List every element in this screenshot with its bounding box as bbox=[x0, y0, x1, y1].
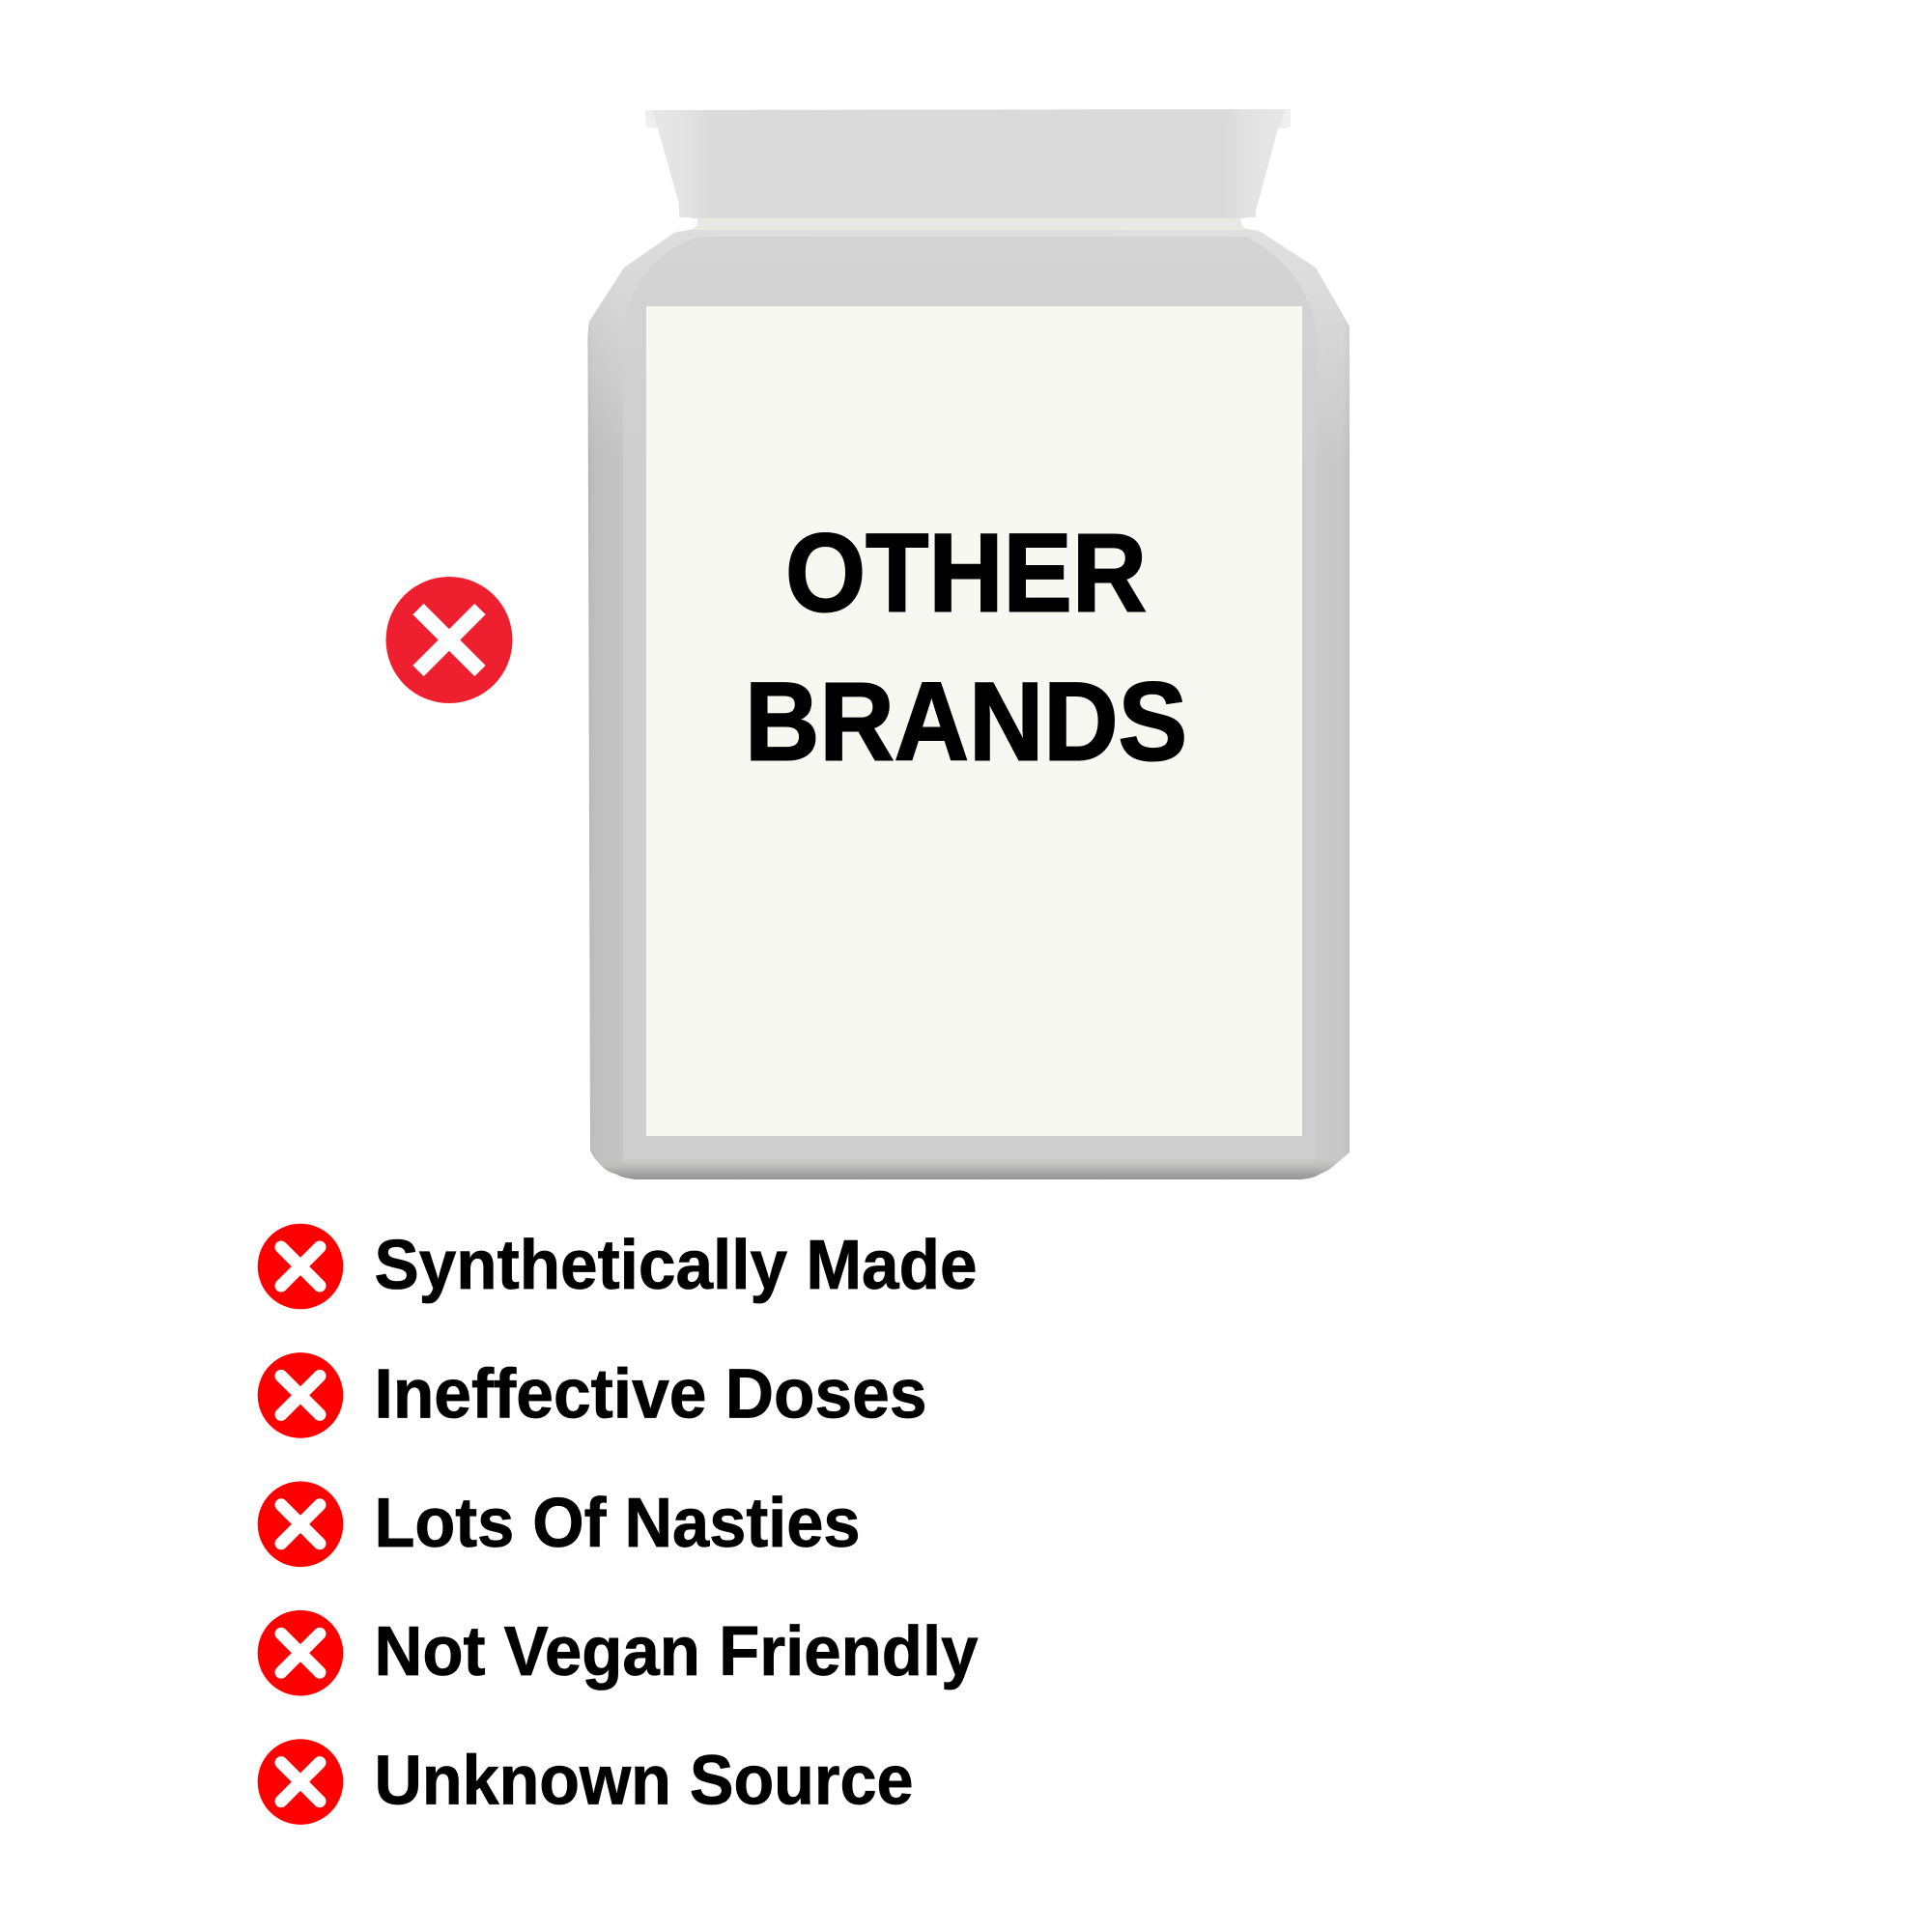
heading: other brands: OTHER bbox=[785, 512, 1147, 636]
list item: not vegan friendly bbox=[258, 1610, 978, 1695]
label: Ineffective Doses bbox=[375, 1355, 927, 1433]
list item: lots of nasties bbox=[258, 1482, 860, 1567]
bottle label bbox=[646, 306, 1302, 1136]
bottle neck bbox=[676, 214, 1256, 232]
icon: large red cross bbox=[386, 577, 512, 703]
icon: red cross bbox=[258, 1352, 343, 1438]
bottle cap bbox=[645, 109, 1291, 218]
heading: other brands: BRANDS bbox=[745, 661, 1187, 784]
icon: red cross bbox=[258, 1224, 343, 1309]
product bottle bbox=[580, 109, 1362, 1188]
list item: ineffective doses bbox=[258, 1352, 927, 1438]
heading: other brands bbox=[745, 512, 1187, 784]
label: Not Vegan Friendly bbox=[375, 1613, 978, 1690]
label: Lots Of Nasties bbox=[375, 1485, 860, 1562]
list item: synthetically made bbox=[258, 1224, 978, 1309]
icon: red cross bbox=[258, 1739, 343, 1825]
list item: unknown source bbox=[258, 1739, 914, 1825]
bottle body bbox=[580, 222, 1362, 1188]
icon: red cross bbox=[258, 1482, 343, 1567]
label: Synthetically Made bbox=[375, 1227, 978, 1304]
icon: red cross bbox=[258, 1610, 343, 1695]
label: Unknown Source bbox=[375, 1743, 914, 1820]
